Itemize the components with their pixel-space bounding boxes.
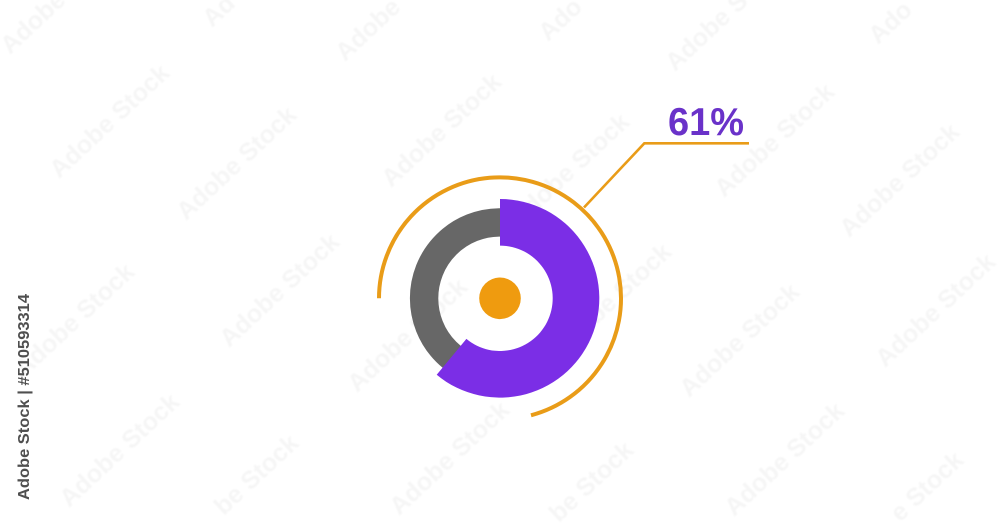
watermark pattern: Adobe Stock (834, 118, 965, 242)
watermark pattern: Adobe Stock (719, 397, 850, 521)
watermark pattern: Adobe Stock (546, 238, 677, 362)
center dot (479, 278, 521, 319)
percentage label: 61% (668, 101, 744, 144)
watermark pattern: be Stock (544, 436, 639, 527)
outer orange arc (379, 177, 621, 415)
watermark pattern: e Stock (885, 446, 969, 527)
watermark pattern: Adobe Stock (376, 68, 507, 192)
watermark pattern: Adobe Stock (214, 228, 345, 352)
watermark pattern: Adobe Stock (44, 59, 175, 183)
watermark pattern: Adobe Stock (384, 396, 515, 520)
purple 61% segment (437, 199, 599, 398)
watermark pattern: Adobe Stock (9, 258, 140, 382)
watermark pattern: Adobe Stock (54, 388, 185, 512)
watermark pattern: Adobe Stock (171, 101, 302, 225)
donut chart: 61% (424, 199, 599, 398)
watermark pattern: Adobe Stock (674, 278, 805, 402)
watermark pattern: Adobe Stock (709, 78, 840, 202)
gray remainder ring (424, 222, 576, 374)
watermark pattern: Adobe Stock (342, 273, 473, 397)
stock id side label: Adobe Stock | #510593314 (16, 294, 33, 500)
leader line (584, 143, 749, 208)
watermark pattern: be Stock (209, 429, 304, 520)
watermark pattern: Adobe Stock (870, 248, 1000, 372)
watermark pattern: Adobe Stock (504, 108, 635, 232)
